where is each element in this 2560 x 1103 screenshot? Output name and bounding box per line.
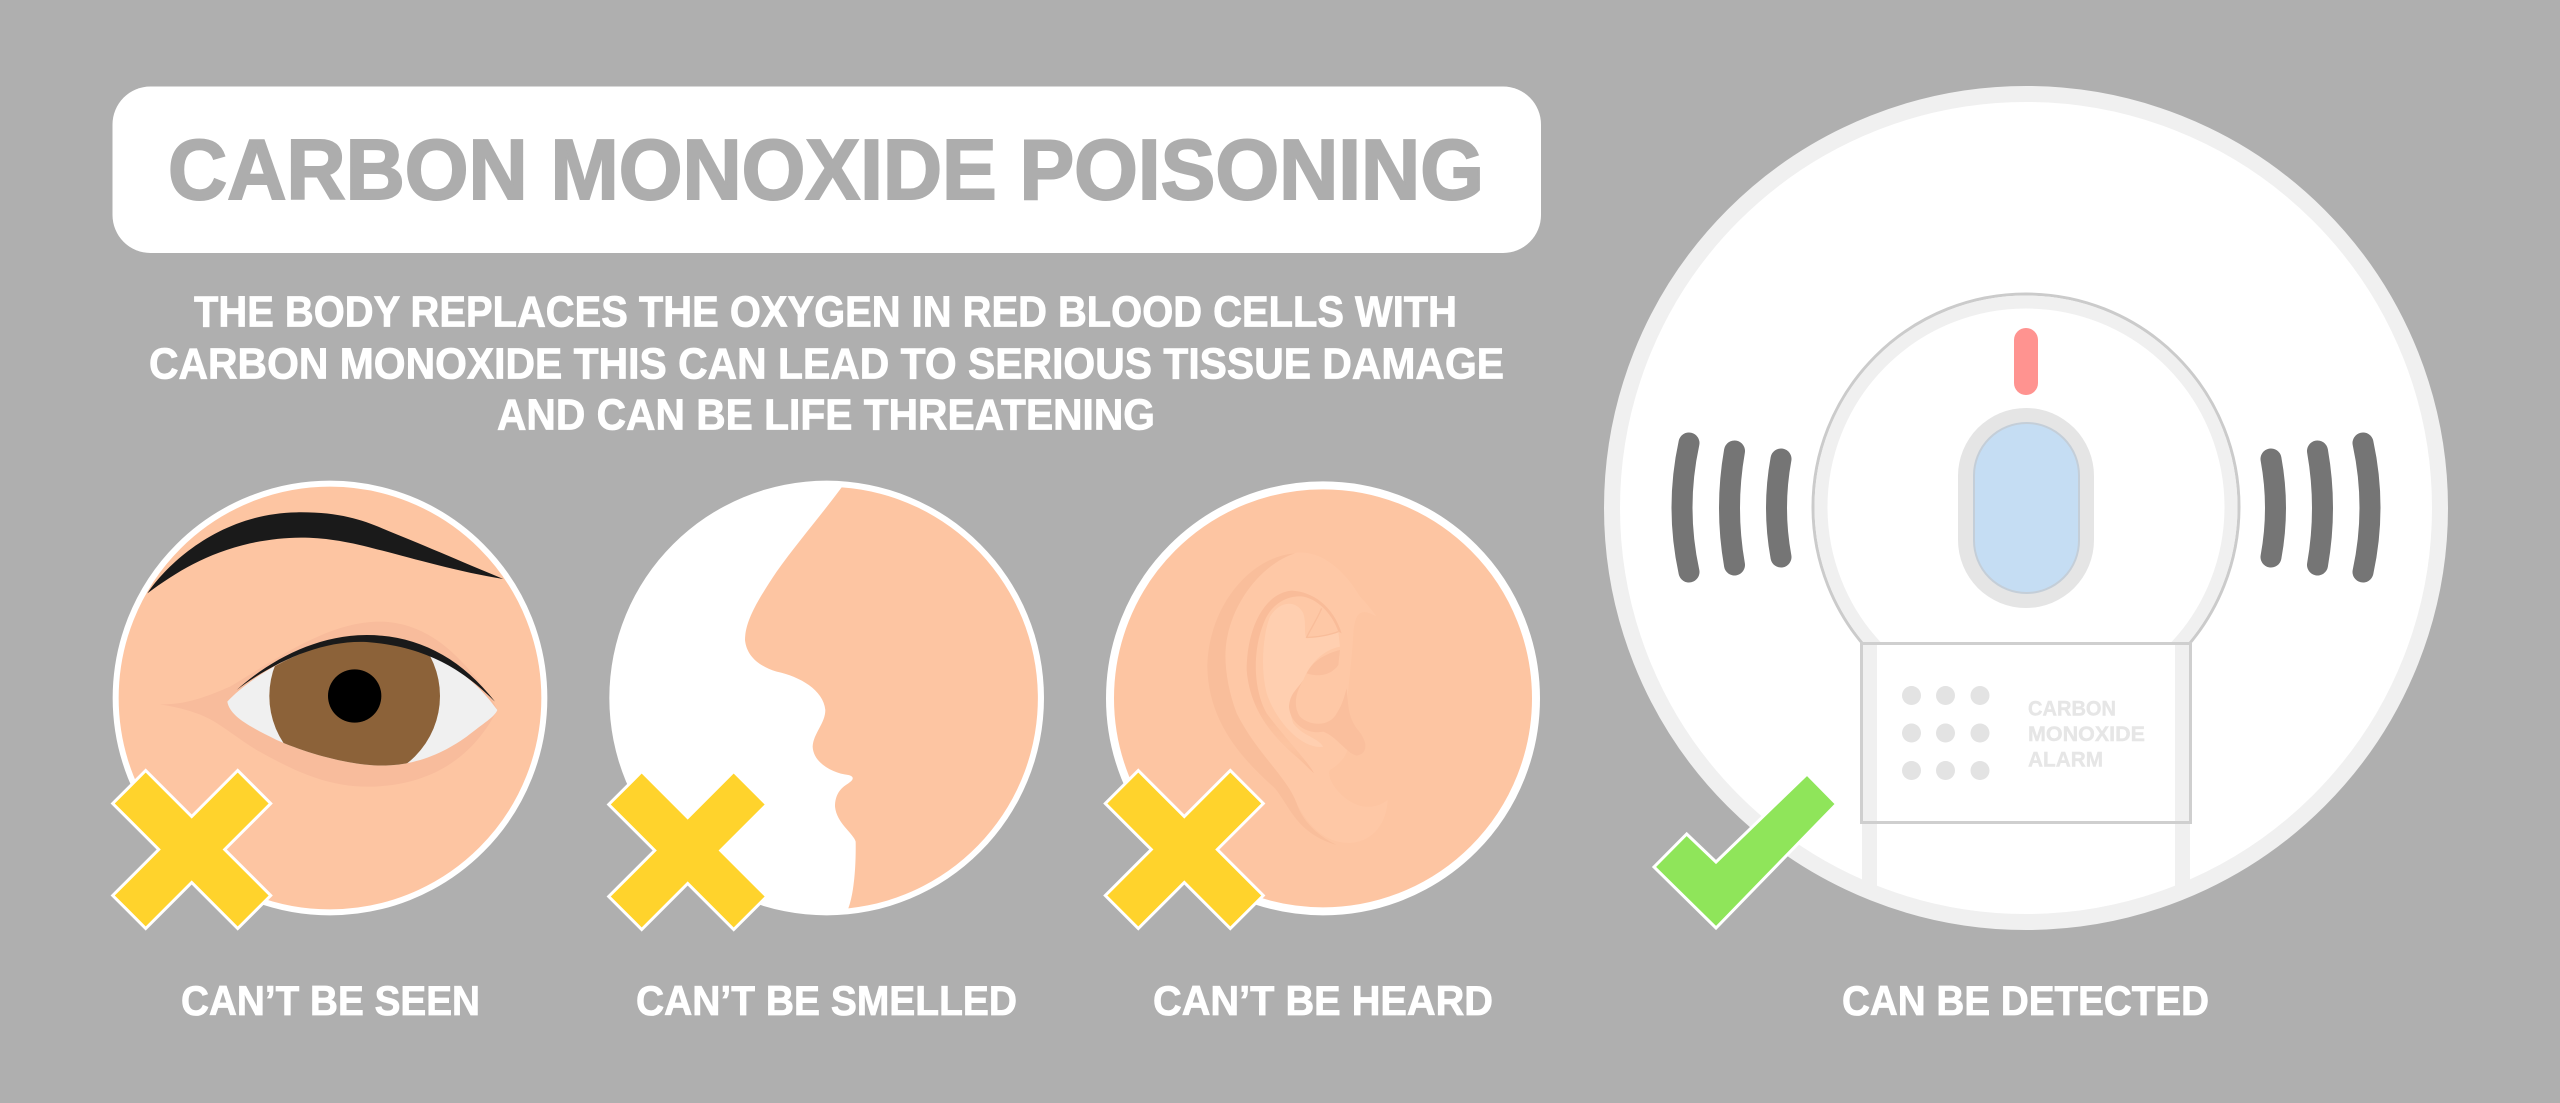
alarm side rails bbox=[1862, 822, 2190, 888]
panel: can't be heard (ear) bbox=[1105, 485, 1536, 1024]
alarm label text: CARBON bbox=[2028, 696, 2116, 720]
speaker holes bbox=[1902, 686, 1990, 780]
panel: can't be smelled (nose) bbox=[609, 481, 1044, 1024]
icon: yellow cross bbox=[609, 772, 767, 930]
description text block: THE BODY REPLACES THE OXYGEN IN RED BLOOD CELLS WITH bbox=[194, 289, 1457, 337]
label: can't be seen: CAN’T BE SEEN bbox=[181, 977, 480, 1024]
alarm faceplate bbox=[1862, 644, 2190, 822]
panel: can't be seen (eye) bbox=[113, 484, 544, 1024]
title banner bbox=[112, 86, 1541, 253]
description text block: AND CAN BE LIFE THREATENING bbox=[497, 391, 1155, 439]
alarm label text bbox=[2028, 696, 2145, 772]
label: can't be smelled: CAN’T BE SMELLED bbox=[636, 977, 1017, 1024]
icon: carbon monoxide alarm bbox=[1813, 294, 2239, 888]
sound waves left bbox=[1682, 443, 1781, 572]
alarm label text: ALARM bbox=[2028, 748, 2103, 772]
icon: yellow cross bbox=[113, 770, 271, 928]
icon: ear bbox=[1110, 485, 1536, 911]
icon: face profile bbox=[609, 481, 1044, 915]
icon: yellow cross bbox=[1105, 770, 1263, 928]
description text block bbox=[149, 289, 1504, 439]
red indicator light bbox=[2014, 328, 2038, 395]
label: can't be heard: CAN’T BE HEARD bbox=[1153, 977, 1493, 1024]
icon: green check mark bbox=[1654, 774, 1836, 928]
label: can be detected: CAN BE DETECTED bbox=[1842, 977, 2209, 1024]
alarm dome bbox=[1813, 294, 2239, 720]
icon: eye bbox=[116, 484, 544, 912]
panel: can be detected (alarm) bbox=[1612, 94, 2440, 1024]
big circle bbox=[1612, 94, 2440, 922]
title text: CARBON MONOXIDE POISONING bbox=[168, 123, 1484, 218]
alarm label text: MONOXIDE bbox=[2028, 722, 2145, 746]
description text block: CARBON MONOXIDE THIS CAN LEAD TO SERIOUS TISSUE DAMAGE bbox=[149, 340, 1504, 388]
sensor window bbox=[1958, 408, 2094, 608]
sound waves right bbox=[2271, 443, 2370, 572]
